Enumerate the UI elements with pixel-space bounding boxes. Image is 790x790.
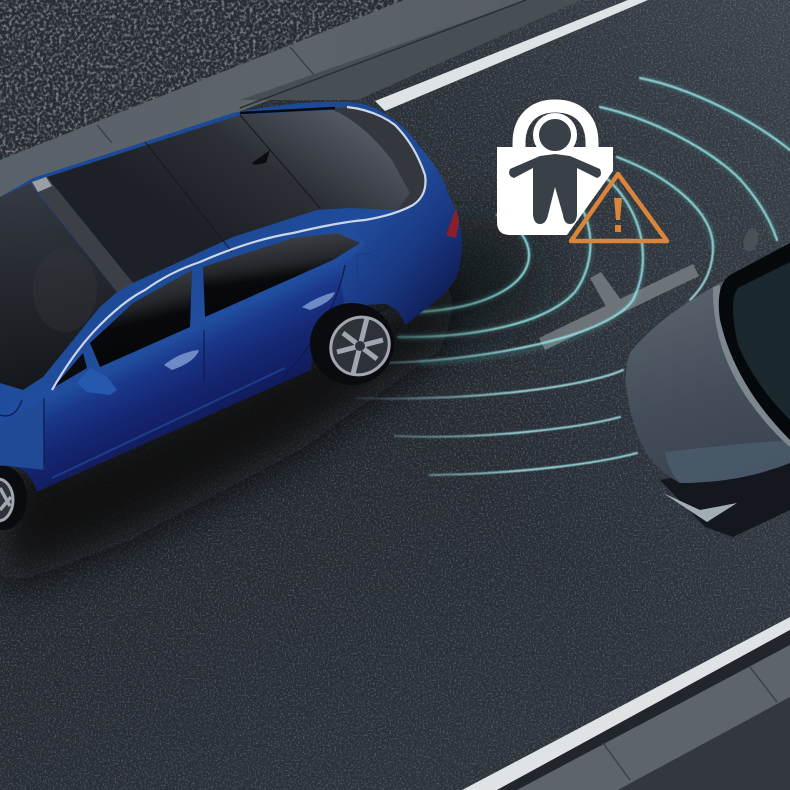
lock body [497, 147, 613, 235]
blue car [0, 102, 462, 530]
windshield base trim [713, 285, 790, 447]
rear quarter [340, 147, 462, 325]
sill highlight [52, 368, 285, 478]
interior seat [33, 248, 97, 332]
hood [626, 243, 790, 483]
windshield [0, 183, 117, 390]
car body [0, 102, 462, 492]
gravel verge top left [0, 0, 404, 160]
pillar highlight [32, 177, 52, 192]
dark patch and car shadow on road [0, 218, 540, 590]
front wing highlight [0, 400, 45, 470]
door shut lines [0, 265, 345, 470]
windshield interior [733, 262, 790, 420]
chrome trim [52, 107, 426, 390]
lock shackle [519, 106, 592, 150]
icon: warning triangle [571, 174, 667, 241]
lower bumper [660, 455, 790, 537]
spoiler band [333, 107, 426, 210]
windshield pillar [30, 177, 133, 292]
wing mirror grey car [741, 227, 761, 253]
sensor wave glow [398, 78, 790, 363]
rear wheel [310, 303, 401, 387]
tail light [446, 208, 459, 238]
white parking line top [375, 0, 648, 111]
fuel flap [357, 254, 383, 288]
door handles [164, 350, 199, 370]
child figure [509, 154, 601, 224]
child head [536, 116, 574, 154]
white parking line and curb bottom [462, 617, 790, 790]
quarter window [53, 353, 87, 388]
parking T marking [539, 264, 699, 350]
sensor waves [355, 78, 790, 475]
roof glass [47, 110, 410, 283]
front side window [90, 270, 192, 367]
hood reflection [665, 440, 790, 483]
rear side window [203, 233, 360, 317]
wing mirror [77, 368, 117, 395]
windshield [719, 243, 790, 440]
shark fin antenna [252, 150, 270, 165]
spoiler top edge [240, 108, 335, 113]
grey car [626, 227, 790, 537]
sidewalk and curb top [0, 0, 581, 205]
exclamation mark [614, 198, 622, 232]
front wheel [0, 466, 27, 530]
headlight [663, 493, 737, 522]
roof seams [145, 115, 320, 252]
icon: child lock [497, 106, 613, 235]
